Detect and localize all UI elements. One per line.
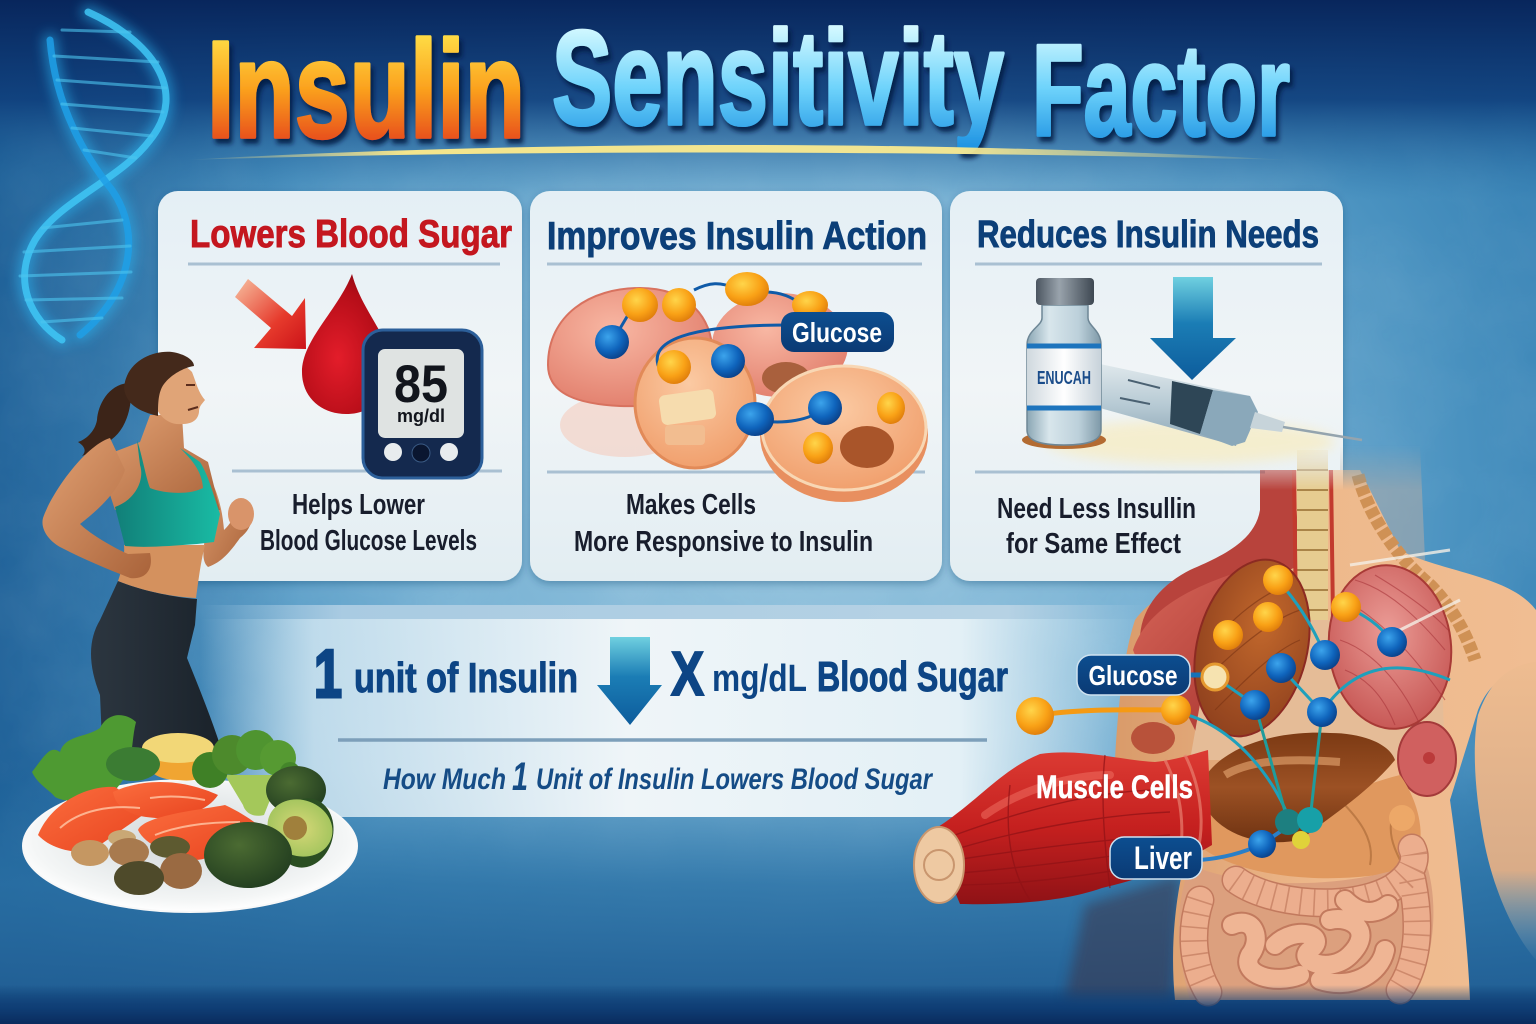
eye and smile bbox=[186, 385, 198, 410]
right side organ bbox=[1398, 722, 1456, 796]
body text: Helps Lower bbox=[292, 489, 425, 521]
anatomy connector lines bbox=[1035, 580, 1450, 860]
lettuce bbox=[32, 715, 136, 801]
warm glow under syringe bbox=[1045, 420, 1335, 464]
illustration: muscle cells bundle bbox=[914, 750, 1212, 904]
nuts bbox=[71, 830, 202, 895]
plate bbox=[23, 780, 357, 912]
colon bbox=[1194, 848, 1417, 992]
back right cell bbox=[712, 293, 848, 397]
label: Glucose: Glucose bbox=[1088, 660, 1178, 691]
back arm bbox=[200, 465, 252, 567]
muscle cut end bbox=[914, 827, 964, 903]
white nerve strands bbox=[1350, 550, 1460, 640]
formula caption bbox=[383, 755, 934, 799]
neck and shoulders bbox=[98, 415, 220, 510]
icon: glucose meter bbox=[363, 330, 482, 478]
body text: Blood Glucose Levels bbox=[260, 525, 477, 557]
title word: Insulin: Insulin bbox=[207, 13, 525, 167]
formula: X mg/dL blood sugar: Blood Sugar bbox=[817, 653, 1008, 700]
illustration: anatomy torso bbox=[1065, 445, 1536, 1000]
formula caption: 1 bbox=[512, 755, 528, 799]
dotted cell shadow bbox=[560, 393, 690, 457]
neck skin bbox=[1340, 445, 1425, 560]
label: Liver: Liver bbox=[1134, 840, 1192, 876]
title word: Sensitivity: Sensitivity bbox=[552, 4, 1004, 153]
formula caption: How Much bbox=[383, 763, 506, 796]
body text bbox=[260, 489, 477, 557]
avocado half bbox=[259, 766, 341, 874]
label: Liver bbox=[1110, 837, 1202, 879]
leggings bbox=[91, 581, 221, 770]
icon: insulin vial: ENUCAH bbox=[1037, 368, 1091, 388]
left lung bbox=[1193, 558, 1311, 738]
panel card bbox=[950, 191, 1343, 581]
liver bbox=[1198, 733, 1395, 842]
body text: Need Less Insullin bbox=[997, 493, 1196, 525]
heading: Lowers Blood Sugar bbox=[190, 213, 512, 256]
panel: improves insulin action bbox=[530, 191, 942, 581]
salmon stripes bbox=[60, 797, 240, 835]
green leaf bbox=[106, 747, 160, 781]
stomach region bbox=[1195, 775, 1421, 878]
small intestine loops bbox=[1232, 900, 1388, 983]
right arm bbox=[1475, 662, 1536, 960]
midriff bbox=[118, 545, 205, 598]
fist bbox=[228, 498, 254, 530]
heading: Reduces Insulin Needs bbox=[977, 214, 1319, 256]
label: Glucose: Glucose bbox=[792, 317, 882, 348]
broccoli bbox=[192, 730, 300, 816]
sports top bbox=[115, 440, 220, 547]
panel: lowers blood sugar bbox=[158, 191, 522, 581]
body text bbox=[574, 489, 873, 558]
shadowed far arm bbox=[1065, 875, 1180, 1000]
formula: 1 unit of insulin: 1 bbox=[314, 636, 342, 712]
salmon fillets bbox=[38, 782, 258, 860]
hair bbox=[124, 352, 194, 416]
title bbox=[207, 4, 1290, 167]
icon: red down arrow bbox=[235, 279, 306, 349]
icon: glucose meter: mg/dl bbox=[397, 406, 445, 426]
label: Muscle Cells: Muscle Cells bbox=[1036, 769, 1193, 805]
clavicle edge strip bbox=[1358, 475, 1475, 660]
illustration: runner bbox=[42, 352, 254, 770]
formula: X mg/dL blood sugar: mg/dL bbox=[712, 658, 807, 700]
neck strap muscle bbox=[1140, 470, 1300, 640]
muscle highlight bbox=[985, 775, 1110, 815]
left lung fibres bbox=[1214, 592, 1300, 710]
lemon bowl bbox=[141, 735, 215, 781]
arrow: lowers bbox=[597, 637, 662, 725]
label: Glucose bbox=[781, 312, 894, 352]
front arm bbox=[42, 438, 151, 578]
icon: DNA helix bbox=[20, 12, 166, 340]
panel: reduces insulin needs bbox=[950, 191, 1362, 581]
ponytail bbox=[78, 383, 131, 456]
formula: 1 unit of insulin: unit of Insulin bbox=[354, 654, 578, 701]
title underline bbox=[185, 145, 1290, 160]
glucose and insulin molecules on anatomy bbox=[1016, 565, 1407, 858]
connector lines bbox=[612, 284, 825, 422]
panel card bbox=[158, 191, 522, 581]
shoulder and chest muscle bbox=[1133, 575, 1230, 731]
formula: X mg/dL blood sugar bbox=[671, 640, 1008, 709]
body text: Makes Cells bbox=[626, 489, 756, 521]
title word: Factor: Factor bbox=[1032, 17, 1290, 163]
band background bbox=[200, 619, 1150, 817]
body text bbox=[997, 493, 1196, 560]
shoulder and torso skin bbox=[1115, 470, 1536, 1000]
body text: More Responsive to Insulin bbox=[574, 526, 873, 558]
right lung bbox=[1328, 564, 1452, 730]
center cell bbox=[635, 338, 755, 468]
icon: syringe bbox=[1100, 364, 1362, 446]
illustration: cells bbox=[548, 272, 928, 502]
trachea bbox=[1297, 450, 1328, 620]
muscle fibers bbox=[955, 755, 1201, 900]
panel: formula band bbox=[200, 605, 1150, 817]
face bbox=[150, 363, 205, 424]
icon: glucose meter: 85 bbox=[394, 355, 448, 414]
abdominal cavity bbox=[1179, 860, 1433, 1000]
formula: X mg/dL blood sugar: X bbox=[671, 640, 704, 709]
whole avocado bbox=[204, 822, 292, 888]
chest interior bbox=[1190, 620, 1445, 760]
big cell bbox=[760, 368, 928, 502]
panel card bbox=[530, 191, 942, 581]
left cell bbox=[548, 288, 712, 406]
body text: for Same Effect bbox=[1006, 528, 1181, 560]
formula caption: Unit of Insulin Lowers Blood Sugar bbox=[536, 763, 934, 796]
heading: Improves Insulin Action bbox=[547, 215, 927, 258]
illustration: healthy food plate bbox=[23, 715, 357, 912]
small heart lump bbox=[1131, 722, 1175, 754]
arrow: down bbox=[1150, 277, 1236, 380]
right lung details bbox=[1340, 575, 1448, 725]
formula: 1 unit of insulin bbox=[314, 636, 578, 712]
icon: blood drop bbox=[302, 274, 392, 414]
icon: insulin vial bbox=[1022, 278, 1106, 449]
glucose and insulin molecules bbox=[595, 272, 905, 464]
label: Glucose bbox=[1077, 655, 1190, 695]
